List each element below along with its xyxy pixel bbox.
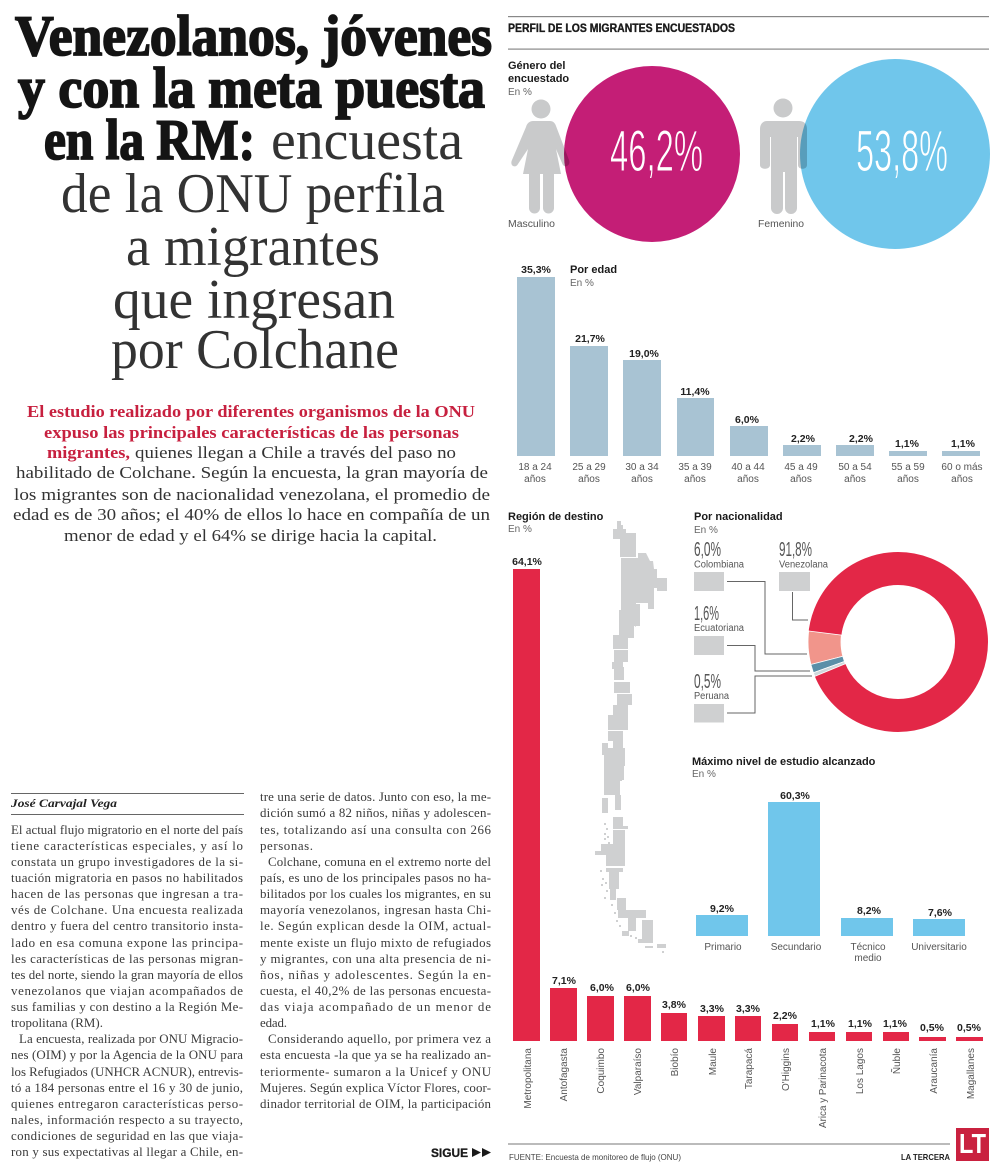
- region values: 1,1%: [811, 1018, 836, 1030]
- article column 1: El actual flujo migratorio en el norte del país: [11, 823, 243, 837]
- education labels: Secundario: [771, 942, 822, 953]
- region labels: Los Lagos: [855, 1048, 866, 1094]
- logo: LT: LT: [959, 1128, 986, 1159]
- region values: 6,0%: [590, 982, 615, 994]
- age labels: 18 a 24: [518, 462, 552, 473]
- region labels: Coquimbo: [596, 1048, 607, 1094]
- education heading: En %: [692, 769, 716, 780]
- infographic heading: PERFIL DE LOS MIGRANTES ENCUESTADOS: [508, 23, 735, 35]
- article column 2: dición sumó a 82 niños, niñas y adolescen-: [260, 806, 491, 820]
- donut chart: [808, 568, 972, 716]
- source footer: LA TERCERA: [901, 1152, 950, 1162]
- article column 2: bilitados por los cuales los migrantes, en su: [260, 887, 492, 901]
- age values: 2,2%: [791, 433, 816, 445]
- title: a migrantes: [126, 216, 380, 278]
- education bars: [696, 802, 965, 936]
- label: Peruana: 0,5%: [694, 671, 721, 693]
- region heading: [508, 511, 604, 535]
- region values: 1,1%: [883, 1018, 908, 1030]
- intro text block: expuso las principales características de las personas: [44, 423, 459, 442]
- article column 1: [11, 823, 243, 1159]
- education values: [710, 790, 953, 919]
- age labels: 55 a 59: [891, 462, 925, 473]
- article column 2: [260, 790, 492, 1111]
- region labels: Tarapacá: [744, 1048, 755, 1089]
- article column 2: cuesta, el 40,2% de las personas encuesta-: [260, 984, 491, 998]
- education labels: [704, 942, 967, 964]
- bar chart: education: [692, 756, 967, 964]
- gender heading: En %: [508, 87, 532, 98]
- region labels: Metropolitana: [523, 1048, 534, 1109]
- region values: [512, 556, 982, 1034]
- article column 1: tes del norte, siendo la gran mayoría de ellos: [11, 968, 243, 982]
- label: Masculino: Masculino: [508, 219, 555, 230]
- article column 1: los Refugiados (UNHCR ACNUR), entrevis-: [11, 1065, 243, 1079]
- icon: male figure: [760, 98, 807, 214]
- nationality heading: [694, 511, 783, 536]
- article column 2: Considerando aquello, por primera vez a: [268, 1032, 491, 1046]
- region labels: Antofagasta: [559, 1048, 570, 1101]
- age values: [521, 264, 976, 450]
- education labels: Primario: [704, 942, 742, 953]
- region labels: Biobío: [670, 1048, 681, 1076]
- age labels: años: [737, 474, 759, 485]
- age heading: Por edad: [570, 264, 617, 276]
- education values: 8,2%: [857, 905, 882, 917]
- title: y con la meta puesta: [18, 57, 485, 120]
- intro text block: menor de edad y el 64% se dirige hacia la capital.: [64, 526, 437, 545]
- age labels: años: [844, 474, 866, 485]
- education values: 9,2%: [710, 903, 735, 915]
- age values: 1,1%: [895, 438, 920, 450]
- label: Venezolana: [779, 539, 828, 591]
- article column 1: tó a 184 personas entre el 16 y 30 de junio,: [11, 1081, 243, 1095]
- article column 1: condiciones de seguridad en las que viaja-: [11, 1129, 243, 1143]
- label: Ecuatoriana: 1,6%: [694, 603, 719, 625]
- article column 2: das viaja acompañado de un menor de: [260, 1000, 491, 1014]
- region labels: Arica y Parinacota: [818, 1048, 829, 1128]
- nationality heading: En %: [694, 525, 718, 536]
- region values: 0,5%: [920, 1022, 945, 1034]
- age values: 1,1%: [951, 438, 976, 450]
- label: Peruana: Peruana: [694, 691, 729, 702]
- article column 1: quienes entregaron características perso-: [11, 1097, 243, 1111]
- continue marker: SIGUE: [431, 1146, 468, 1160]
- source footer: FUENTE: Encuesta de monitoreo de flujo (ONU): [509, 1152, 681, 1162]
- article column 1: ron y sus expectativas al llegar a Chile, en-: [11, 1145, 243, 1159]
- region values: 2,2%: [773, 1010, 798, 1022]
- article column 2: personas.: [260, 839, 313, 853]
- article column 1: hacen de las personas que ingresan a tra-: [11, 887, 243, 901]
- article column 2: país, es uno de los principales pasos no ha-: [260, 871, 491, 885]
- article column 2: dinador territorial de OIM, la participación: [260, 1097, 492, 1111]
- gender heading: [508, 60, 569, 98]
- region labels: Ñuble: [890, 1048, 903, 1074]
- pink circle 46,2%: 46,2%: [610, 119, 703, 184]
- education labels: Universitario: [911, 942, 967, 953]
- article column 1: La encuesta, realizada por ONU Migracio-: [19, 1032, 243, 1046]
- age labels: 60 o más: [941, 462, 983, 473]
- article column 2: teriormente- sumaron a la Unicef y ONU: [260, 1065, 492, 1079]
- panel: nationality: [694, 511, 972, 722]
- article column 2: Colchane, comuna en el extremo norte del: [268, 855, 491, 869]
- article column 2: mente existe un flujo mixto de refugiados: [260, 936, 491, 950]
- age labels: años: [951, 474, 973, 485]
- age values: 35,3%: [521, 264, 552, 276]
- article column 1: sus familias y con destino a la Región Me-: [11, 1000, 243, 1014]
- panel: gender: [508, 59, 990, 249]
- byline: José Carvajal Vega: [10, 796, 117, 810]
- title: en la RM:: [44, 109, 255, 172]
- age labels: [518, 462, 983, 485]
- icon: female figure: [511, 100, 569, 214]
- region values: 7,1%: [552, 975, 577, 987]
- region values: 6,0%: [626, 982, 651, 994]
- label: Ecuatoriana: Ecuatoriana: [694, 623, 744, 634]
- map of Chile: [595, 521, 667, 953]
- age bars: [517, 277, 980, 456]
- intro text block: edad es de 30 años; el 40% de ellos lo hace en compañía de un: [13, 505, 491, 524]
- age labels: 45 a 49: [784, 462, 818, 473]
- article column 2: tre una serie de datos. Junto con eso, la me-: [260, 790, 491, 804]
- pink circle 46,2%: [564, 66, 740, 242]
- intro text block: [13, 402, 491, 545]
- region values: 1,1%: [848, 1018, 873, 1030]
- bar chart: age: [517, 264, 983, 485]
- article column 1: tropolitana (RM).: [11, 1016, 103, 1030]
- article column 1: tiene características especiales, y así lo: [11, 839, 243, 853]
- age values: 19,0%: [629, 348, 660, 360]
- age values: 21,7%: [575, 333, 606, 345]
- age labels: 25 a 29: [572, 462, 606, 473]
- region labels: Araucanía: [929, 1048, 940, 1094]
- article column 2: Mujeres. Según explica Víctor Flores, coor-: [260, 1081, 491, 1095]
- education labels: medio: [854, 953, 882, 964]
- age labels: 30 a 34: [625, 462, 659, 473]
- region labels: Maule: [708, 1048, 719, 1075]
- label: Peruana: [694, 671, 729, 722]
- age labels: 50 a 54: [838, 462, 872, 473]
- article column 2: edad.: [260, 1016, 287, 1030]
- region heading: Región de destino: [508, 511, 604, 523]
- article column 1: nales, información respecto a su trayecto,: [11, 1113, 243, 1127]
- education values: 60,3%: [780, 790, 811, 802]
- age heading: En %: [570, 278, 594, 289]
- region labels: Valparaíso: [633, 1048, 644, 1095]
- gender heading: encuestado: [508, 73, 569, 85]
- article column 2: le. Según explican desde la OIM, actual-: [260, 919, 491, 933]
- gender heading: Género del: [508, 60, 565, 72]
- article column 1: vés de Colchane. Una encuesta realizada: [11, 903, 243, 917]
- article column 2: tes, totalizando así una consulta con 266: [260, 823, 492, 837]
- region heading: En %: [508, 524, 532, 535]
- panel: destination region: [508, 511, 983, 1128]
- label: Femenino: Femenino: [758, 219, 804, 230]
- leader lines: [727, 582, 812, 713]
- label: Venezolana: Venezolana: [779, 560, 828, 570]
- intro text block: habilitado de Colchane. Según la encuesta, la gran mayoría de: [16, 463, 488, 482]
- age values: 11,4%: [680, 386, 710, 398]
- age values: 6,0%: [735, 414, 760, 426]
- region values: 3,3%: [736, 1003, 761, 1015]
- title: por Colchane: [111, 319, 399, 381]
- article column 1: lado en esa comuna expone las principa-: [11, 936, 243, 950]
- blue circle 53,8%: [800, 59, 990, 249]
- region labels: Magallanes: [966, 1048, 977, 1099]
- region values: 3,3%: [700, 1003, 725, 1015]
- education heading: [692, 756, 876, 780]
- title: que ingresan: [113, 269, 395, 331]
- article column 1: constata un grupo investigadores de la si-: [11, 855, 243, 869]
- article column 1: dentro y fuera del centro transitorio insta-: [11, 919, 243, 933]
- region values: 3,8%: [662, 999, 687, 1011]
- label: Colombiana: [694, 539, 744, 591]
- label: Venezolana: 91,8%: [779, 539, 812, 561]
- title: Venezolanos, jóvenes: [15, 5, 492, 68]
- intro text block: quienes llegan a Chile a través del paso no: [135, 443, 456, 462]
- intro text block: migrantes,: [47, 443, 130, 462]
- education values: 7,6%: [928, 907, 953, 919]
- label: Colombiana: Colombiana: [694, 560, 744, 570]
- source footer: [508, 1144, 950, 1162]
- continue marker: [431, 1146, 491, 1160]
- age values: 2,2%: [849, 433, 874, 445]
- intro text block: El estudio realizado por diferentes organismos de la ONU: [27, 402, 475, 421]
- article column 1: les características de las personas migran-: [11, 952, 243, 966]
- region values: 64,1%: [512, 556, 543, 568]
- label: Colombiana: 6,0%: [694, 539, 721, 561]
- intro text block: los migrantes son de nacionalidad venezolana, el promedio de: [14, 485, 490, 504]
- article column 2: esta encuesta -la que ya se ha realizado an-: [260, 1048, 491, 1062]
- region bars: [513, 569, 983, 1041]
- region values: 0,5%: [957, 1022, 982, 1034]
- age labels: 35 a 39: [678, 462, 712, 473]
- age labels: 40 a 44: [731, 462, 765, 473]
- title: de la ONU perfila: [61, 163, 445, 225]
- region labels: O'Higgins: [781, 1048, 792, 1091]
- article column 2: y migrantes, con una alta presencia de ni-: [260, 952, 491, 966]
- age labels: años: [631, 474, 653, 485]
- age labels: años: [578, 474, 600, 485]
- education labels: Técnico: [850, 942, 886, 953]
- article column 1: tuación migratoria en pasos no habilitados: [11, 871, 243, 885]
- article column 1: nes (OIM) y por la Agencia de la ONU para: [11, 1048, 243, 1062]
- article column 2: ños, niñas y adolescentes. Según la en-: [260, 968, 491, 982]
- title: encuesta: [271, 110, 463, 172]
- nationality heading: Por nacionalidad: [694, 511, 783, 523]
- age labels: años: [790, 474, 812, 485]
- age labels: años: [524, 474, 546, 485]
- article column 1: venezolanos que viajan acompañados de: [11, 984, 243, 998]
- age labels: años: [897, 474, 919, 485]
- article column 2: mayoría venezolanos, ingresan hasta Chi-: [260, 903, 491, 917]
- region labels: [523, 1048, 977, 1128]
- title: [15, 5, 492, 381]
- age heading: [570, 264, 617, 289]
- age labels: años: [684, 474, 706, 485]
- label: Ecuatoriana: [694, 603, 744, 655]
- education heading: Máximo nivel de estudio alcanzado: [692, 756, 876, 768]
